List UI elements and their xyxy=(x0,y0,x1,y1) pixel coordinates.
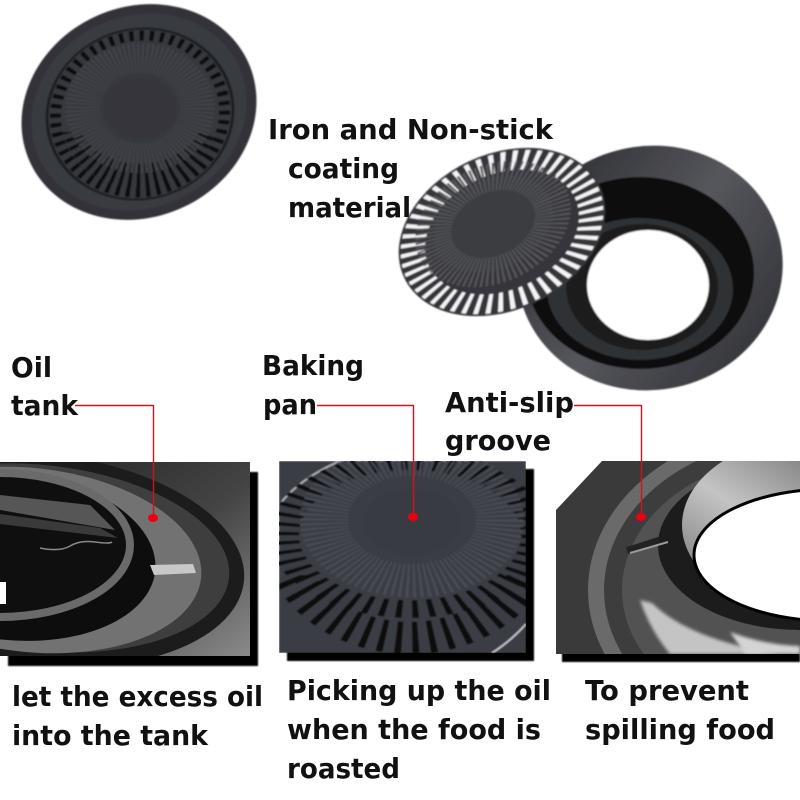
photo panel: oil tank xyxy=(0,462,260,668)
heading: material xyxy=(268,113,554,224)
caption: baking pan: roasted xyxy=(287,752,400,785)
labels with red leader lines xyxy=(11,349,646,522)
label: oil tank: tank xyxy=(11,389,79,422)
label: baking pan: Baking xyxy=(262,349,364,382)
arrow: oil tank leader xyxy=(75,406,158,522)
caption: oil tank xyxy=(12,680,263,752)
photo: assembled grill plate xyxy=(20,3,258,221)
caption: anti-slip groove: spilling food xyxy=(585,713,775,746)
caption: anti-slip groove xyxy=(585,674,775,746)
heading: material: material xyxy=(288,191,411,224)
caption: oil tank: let the excess oil xyxy=(12,680,263,713)
lifted lid xyxy=(371,116,633,348)
label: anti-slip groove: Anti-slip xyxy=(445,386,574,419)
caption: oil tank: into the tank xyxy=(12,719,209,752)
label: oil tank xyxy=(11,351,79,422)
photo: open grill plate with lifted lid xyxy=(371,116,800,411)
label: anti-slip groove: groove xyxy=(445,424,551,457)
label: anti-slip groove xyxy=(445,386,574,457)
heading: material: Iron and Non-stick xyxy=(268,113,554,146)
photo panel: baking pan xyxy=(279,461,536,662)
caption: anti-slip groove: To prevent xyxy=(585,674,749,707)
arrow: anti-slip groove leader xyxy=(574,406,646,521)
photo panel: anti-slip groove xyxy=(556,461,800,664)
heading: material: coating xyxy=(288,152,399,185)
label: baking pan xyxy=(262,349,364,421)
label: baking pan: pan xyxy=(263,388,317,421)
caption: baking pan xyxy=(287,674,551,785)
arrow: baking pan leader xyxy=(317,406,418,521)
drip pan xyxy=(498,125,800,411)
caption: baking pan: Picking up the oil xyxy=(287,674,551,707)
caption: baking pan: when the food is xyxy=(287,713,541,746)
label: oil tank: Oil xyxy=(11,351,52,384)
